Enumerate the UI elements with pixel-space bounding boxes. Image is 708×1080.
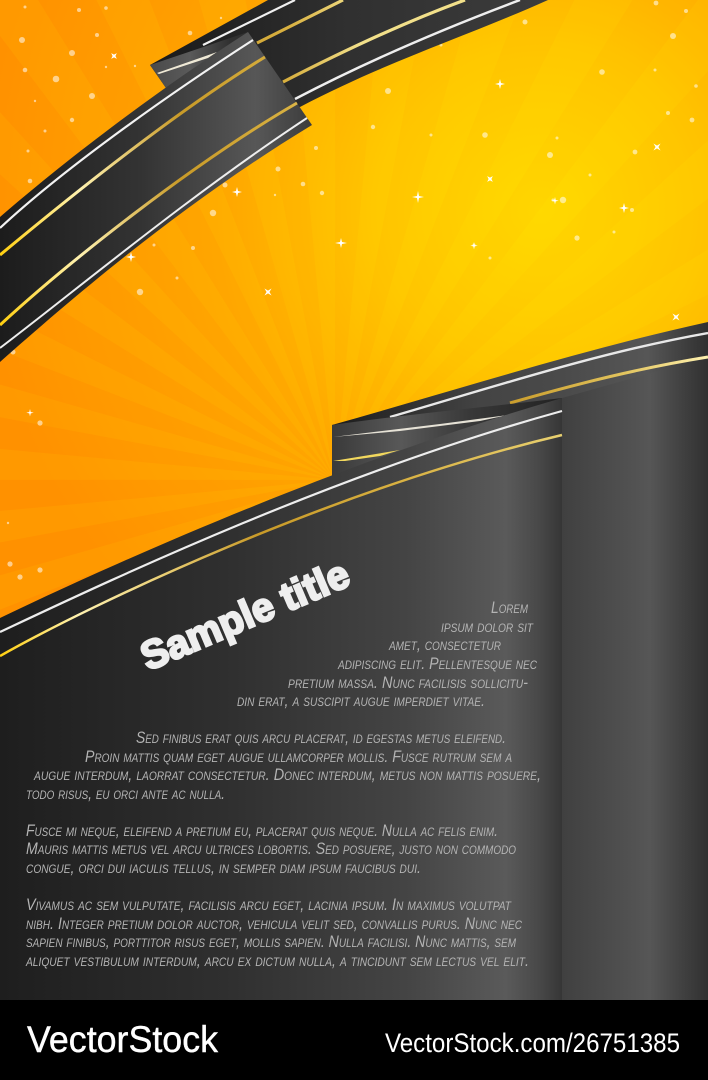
text block: paragraph 2: Sed finibus erat quis arcu placerat, id egestas metus eleifend. (136, 728, 506, 747)
text block: paragraph 2: todo risus, eu orci ante ac nulla. (26, 784, 225, 803)
top ribbon: fold flap (150, 32, 248, 88)
text block: paragraph 2: augue interdum, laorrat consectetur. Donec interdum, metus non mattis posuere, (33, 765, 541, 784)
text block: right aligned intro: Lorem (491, 598, 528, 617)
footer: VectorStock URL: VectorStock.com/26751385 (385, 1028, 680, 1058)
text block: paragraph 3 (26, 821, 516, 877)
title: Sample title (134, 552, 356, 679)
footer: VectorStock logo: VectorStock (27, 1019, 218, 1060)
text block: paragraph 4: Vivamus ac sem vulputate, facilisis arcu eget, lacinia ipsum. In maximus volutpat (26, 895, 512, 914)
lower ribbon: front panel lines (0, 411, 562, 656)
text block: right aligned intro: pretium massa. Nunc facilisis sollicitu- (288, 673, 528, 692)
text block: right aligned intro (237, 598, 537, 710)
lower ribbon: fold highlights (333, 415, 508, 461)
text block: paragraph 4: aliquet vestibulum interdum, arcu ex dictum nulla, a tincidunt sem lectus vel elit. (25, 951, 529, 970)
footer bar (0, 1000, 708, 1080)
text block: paragraph 4 (25, 895, 529, 970)
right panel face (562, 357, 708, 1000)
lower ribbon (0, 322, 708, 1000)
lower ribbon: back band lines (390, 333, 708, 417)
text block: right aligned intro: ipsum dolor sit (441, 617, 534, 636)
text block: paragraph 3: congue, orci dui iaculis tellus, in semper diam ipsum faucibus dui. (26, 858, 421, 877)
top ribbon: back band lines (203, 0, 520, 99)
top ribbon: flap highlight (157, 52, 217, 74)
text block: paragraph 2: Proin mattis quam eget augue ullamcorper mollis. Fusce rutrum sem a (85, 747, 512, 766)
text block: paragraph 4: sapien finibus, porttitor risus eget, mollis sapien. Nulla facilisi. Nunc mattis, sem (26, 932, 516, 951)
stars: round dots (7, 1, 698, 580)
lower ribbon: back band (332, 322, 708, 485)
text block: paragraph 2 (26, 728, 541, 803)
lower ribbon: main front panel (0, 398, 562, 1000)
text block: paragraph 3: Fusce mi neque, eleifend a pretium eu, placerat quis neque. Nulla ac felis enim. (26, 821, 498, 840)
text block: right aligned intro: amet, consectetur (388, 635, 501, 654)
top ribbon: front band (0, 32, 312, 362)
top ribbon: front band lines (0, 40, 307, 348)
top ribbon: back band (150, 0, 548, 107)
top ribbon (0, 0, 548, 362)
stars: sparkles (26, 50, 683, 416)
text block: right aligned intro: din erat, a suscipit augue imperdiet vitae. (237, 691, 485, 710)
text block: right aligned intro: adipiscing elit. Pellentesque nec (337, 654, 537, 673)
text block: paragraph 3: Mauris mattis metus vel arcu ultrices lobortis. Sed posuere, justo non commodo (26, 839, 516, 858)
text block: paragraph 4: nibh. Integer pretium dolor auctor, vehicula velit sed, convallis purus. Nunc nec (26, 914, 522, 933)
lower ribbon: fold piece (332, 398, 562, 485)
